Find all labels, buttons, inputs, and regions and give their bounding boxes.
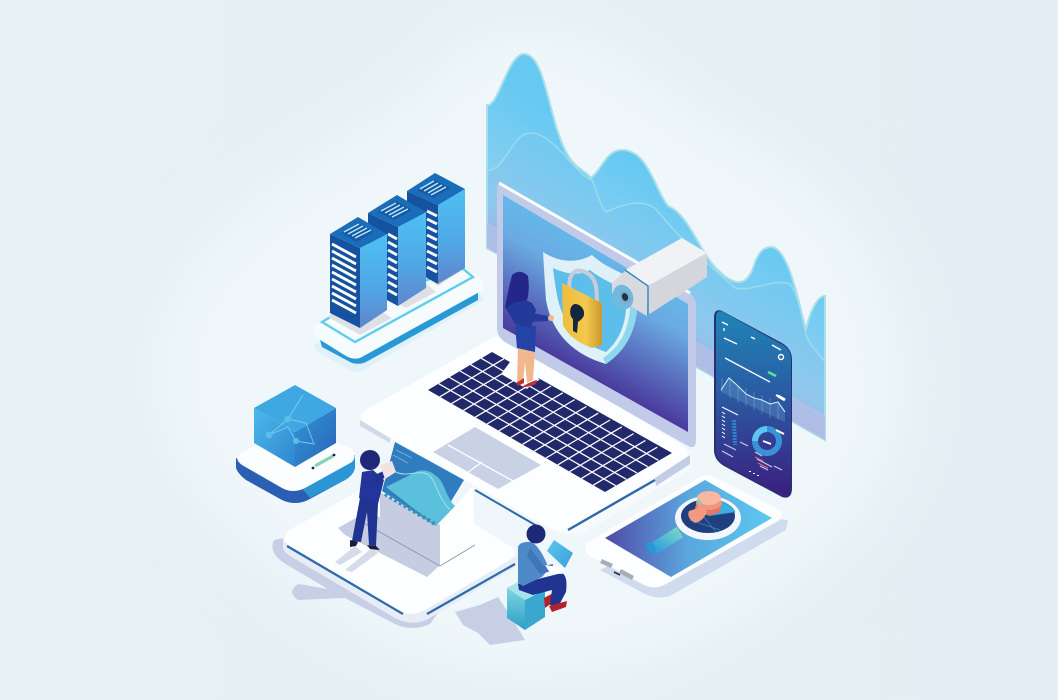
camera hood bbox=[612, 271, 648, 316]
phone donut bbox=[755, 429, 779, 453]
shield side bbox=[603, 282, 638, 364]
phone screen bbox=[716, 311, 791, 495]
skirt bbox=[515, 325, 536, 352]
tower 3 bbox=[407, 173, 465, 284]
person: woman at screen bbox=[505, 272, 554, 387]
device lighter strip bbox=[300, 455, 355, 498]
seat cube left bbox=[507, 588, 525, 630]
camera blue stripe bbox=[625, 270, 648, 315]
base floor shading bbox=[328, 264, 462, 335]
person shadow bbox=[455, 597, 525, 645]
shield inner bbox=[553, 268, 626, 352]
torso bbox=[518, 542, 549, 586]
lens radar bbox=[690, 500, 735, 532]
phone scatter bbox=[734, 420, 735, 445]
area chart waves bbox=[487, 54, 825, 440]
stand screen bbox=[382, 442, 464, 526]
shackle bbox=[569, 271, 597, 305]
red shoes bbox=[516, 378, 537, 387]
accent line right bbox=[427, 564, 515, 614]
back wave bbox=[487, 54, 825, 440]
cube right face bbox=[295, 408, 336, 467]
touchpad bbox=[433, 427, 541, 489]
heels bbox=[350, 540, 380, 550]
shield bbox=[543, 252, 638, 364]
magnifier ring bbox=[675, 496, 741, 540]
person: seated man with cube seat bbox=[455, 524, 573, 645]
tablet shadow bbox=[600, 512, 788, 598]
front shoe bbox=[549, 601, 567, 612]
hair bbox=[526, 524, 546, 544]
lower platform bbox=[272, 442, 518, 628]
laptop bbox=[360, 183, 696, 534]
jacket bbox=[359, 470, 384, 504]
server racks bbox=[313, 173, 484, 372]
arm bbox=[530, 313, 548, 322]
base cyan outline bbox=[322, 268, 473, 342]
mini laptop bbox=[547, 540, 573, 568]
phone status text blocks bbox=[722, 322, 781, 382]
phone shell bbox=[714, 310, 792, 498]
stand buttons bbox=[385, 494, 435, 524]
phone line chart bbox=[721, 372, 785, 422]
deck front accent line left bbox=[475, 490, 537, 526]
keyboard plate bbox=[545, 565, 565, 574]
accent line left bbox=[287, 546, 403, 614]
feet shadow bbox=[335, 546, 378, 572]
laptop deck bbox=[361, 336, 688, 530]
stand right face bbox=[440, 485, 475, 565]
gear icon bbox=[778, 354, 784, 360]
phone value tags bbox=[776, 395, 784, 434]
tablet port small bbox=[614, 572, 620, 575]
tablet screen bbox=[605, 480, 772, 577]
seat cube right bbox=[525, 590, 545, 630]
device blue base bbox=[236, 455, 355, 503]
padlock bbox=[562, 271, 602, 348]
front wave bbox=[487, 133, 825, 440]
camera side bbox=[648, 253, 707, 315]
person: woman with tablet bbox=[350, 450, 396, 550]
device white top bbox=[237, 428, 355, 491]
magnifier handle bbox=[644, 532, 680, 556]
platform top bbox=[284, 475, 515, 614]
hair bbox=[505, 272, 529, 308]
paper bbox=[380, 461, 396, 479]
hand bbox=[548, 315, 554, 321]
deck side strip bbox=[655, 455, 690, 486]
base lower layer bbox=[313, 290, 484, 372]
lens bbox=[609, 282, 637, 312]
legs bbox=[518, 573, 566, 607]
seat cube top bbox=[507, 578, 545, 600]
back shoe bbox=[544, 592, 555, 608]
magnifier lens bbox=[681, 499, 735, 533]
tower 1 bbox=[330, 217, 387, 328]
arm bbox=[527, 548, 553, 574]
wave base stripes bbox=[487, 222, 825, 440]
coral chips bbox=[688, 491, 722, 523]
tablet body bbox=[585, 475, 782, 587]
laptop lid bbox=[497, 184, 696, 447]
security camera bbox=[609, 238, 707, 316]
deck front accent line right bbox=[568, 480, 655, 530]
laptop base side bbox=[362, 420, 692, 534]
lock body bbox=[562, 283, 602, 348]
keyhole bbox=[570, 304, 584, 333]
legs bbox=[352, 498, 378, 546]
phone bar list bbox=[722, 407, 738, 438]
camera top bbox=[625, 238, 707, 286]
stand edges bbox=[362, 522, 475, 566]
platform side bbox=[283, 537, 518, 623]
floor shadow bbox=[338, 510, 440, 577]
arm bbox=[372, 470, 388, 484]
hair bbox=[360, 450, 380, 470]
shield outer bbox=[543, 252, 638, 364]
phone pager dots bbox=[750, 471, 758, 476]
tablet with magnifier bbox=[585, 475, 788, 598]
phone bbox=[714, 310, 792, 498]
base blue strip bbox=[320, 292, 478, 364]
tower 2 bbox=[368, 195, 426, 306]
jacket bbox=[505, 294, 536, 328]
keyboard bbox=[428, 352, 672, 492]
deck side tab bbox=[360, 420, 390, 443]
soft light blob bbox=[154, 25, 908, 678]
lid screen bbox=[503, 195, 688, 432]
platform shadow bbox=[272, 535, 440, 628]
lid white top rim bbox=[499, 183, 690, 293]
phone legend bbox=[722, 442, 782, 470]
base top layer bbox=[313, 272, 483, 359]
tablet ports bbox=[601, 561, 633, 578]
cube nodes bbox=[269, 395, 314, 444]
device indicator bbox=[312, 454, 335, 469]
cube left face bbox=[254, 408, 295, 467]
stand left face bbox=[380, 492, 440, 565]
legs bbox=[517, 347, 535, 383]
cube top face bbox=[254, 385, 336, 432]
hologram cube device bbox=[236, 385, 355, 503]
